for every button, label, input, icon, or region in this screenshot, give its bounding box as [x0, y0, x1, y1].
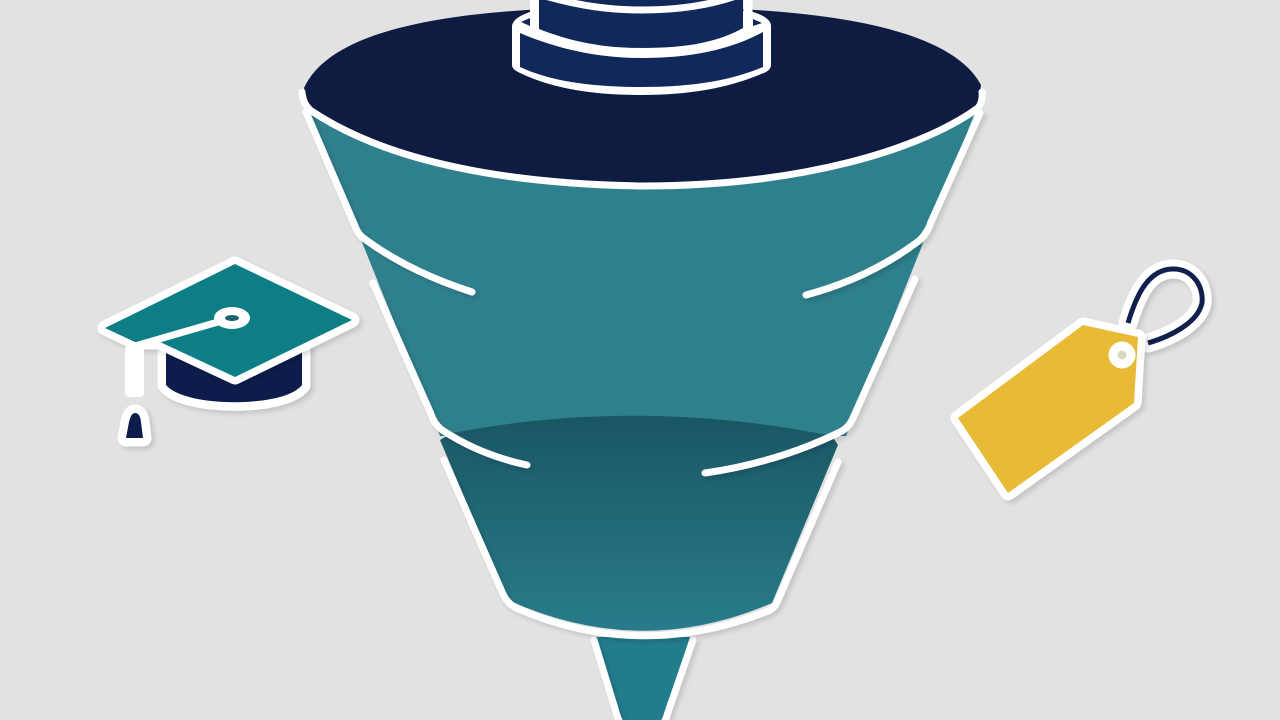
ellipse front rim	[302, 92, 982, 186]
funnel tip	[594, 637, 693, 720]
funnel	[302, 0, 982, 720]
funnel body	[308, 108, 977, 436]
icon: price tag	[958, 269, 1202, 493]
tag body	[958, 325, 1138, 493]
cap board	[105, 264, 352, 377]
tassel cord	[125, 345, 144, 397]
icon: graduation cap	[105, 264, 352, 438]
funnel lower band	[440, 416, 838, 631]
tassel	[126, 413, 143, 438]
cap button and cord	[135, 307, 250, 346]
upper left outline	[306, 112, 472, 292]
funnel top ellipse	[304, 7, 981, 186]
tag loop	[1128, 269, 1202, 343]
upper stacked cylinder	[534, 0, 748, 48]
cap base	[166, 345, 302, 402]
middle right outline	[705, 279, 915, 473]
lower outline	[444, 460, 838, 636]
funnel outlines	[306, 112, 980, 636]
lower stacked cylinder	[512, 11, 771, 95]
middle left outline	[373, 283, 527, 465]
upper right outline	[806, 113, 980, 295]
tag eyelet	[1113, 346, 1131, 364]
